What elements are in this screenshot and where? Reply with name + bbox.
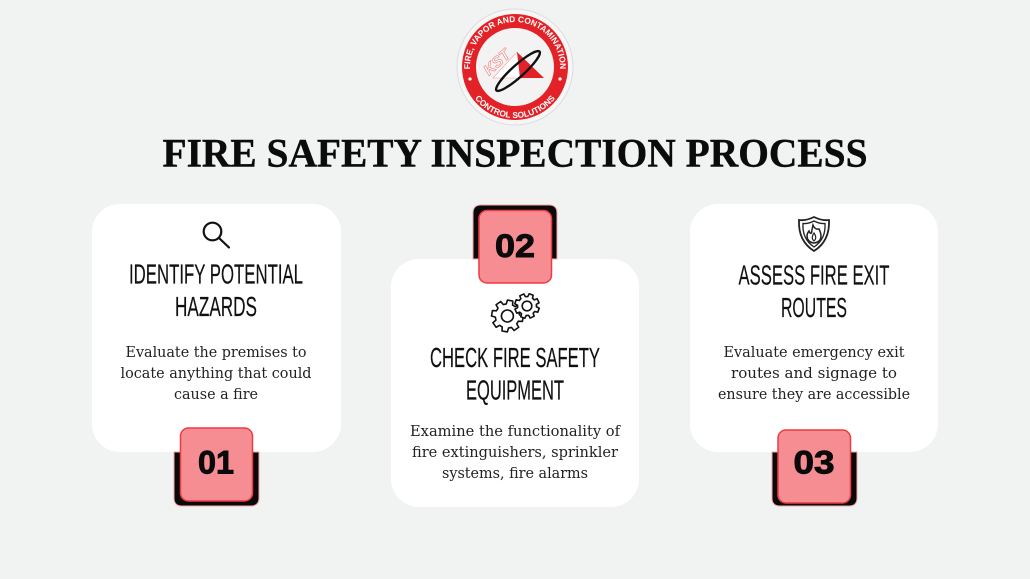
heading: assess fire exit routes — [738, 260, 890, 323]
text: step 3 description: ensure they are accessible — [718, 385, 910, 403]
logo: company seal: CONTROL SOLUTIONS — [476, 96, 554, 118]
badge: 01 — [174, 428, 259, 506]
heading: identify potential hazards: IDENTIFY POTENTIAL — [129, 258, 303, 290]
panel: step 2 check fire safety equipment — [391, 259, 639, 507]
text: step 1 description — [120, 343, 312, 403]
text: step 1 description: locate anything that could — [120, 364, 312, 382]
badge: 02 — [473, 205, 557, 283]
heading: check fire safety equipment: EQUIPMENT — [466, 374, 564, 406]
heading: identify potential hazards — [129, 258, 303, 322]
text: step 3 description — [718, 343, 910, 403]
icon: flame shield — [799, 217, 829, 251]
text: step 2 description: Examine the functionality of — [410, 422, 621, 440]
text: step 2 description: systems, fire alarms — [442, 464, 588, 482]
logo: company seal — [456, 8, 574, 126]
heading: check fire safety equipment — [430, 342, 600, 406]
heading: check fire safety equipment: CHECK FIRE SAFETY — [430, 342, 600, 373]
text: step 1 description: cause a fire — [174, 385, 258, 403]
badge: 02: 02 — [495, 228, 535, 264]
panel: step 3 assess fire exit routes — [690, 204, 938, 452]
icon: gears — [489, 290, 543, 334]
text: step 3 description: routes and signage to — [731, 364, 897, 382]
badge: 03: 03 — [794, 444, 834, 480]
heading: assess fire exit routes: ROUTES — [781, 292, 847, 323]
logo: company seal: FIRE, VAPOR AND CONTAMINATION — [464, 16, 566, 69]
text: step 2 description — [410, 422, 621, 482]
text: step 1 description: Evaluate the premises to — [126, 343, 306, 361]
badge: 03 — [772, 430, 857, 506]
panel: step 1 identify potential hazards — [92, 204, 341, 452]
title: FIRE SAFETY INSPECTION PROCESS — [162, 130, 868, 176]
badge: 01: 01 — [198, 444, 234, 480]
heading: assess fire exit routes: ASSESS FIRE EXIT — [738, 260, 890, 290]
heading: identify potential hazards: HAZARDS — [175, 291, 257, 322]
logo: company seal: KST — [480, 45, 515, 79]
text: step 2 description: fire extinguishers, sprinkler — [412, 443, 619, 461]
icon: magnifying glass — [204, 223, 229, 248]
text: step 3 description: Evaluate emergency exit — [724, 343, 904, 361]
